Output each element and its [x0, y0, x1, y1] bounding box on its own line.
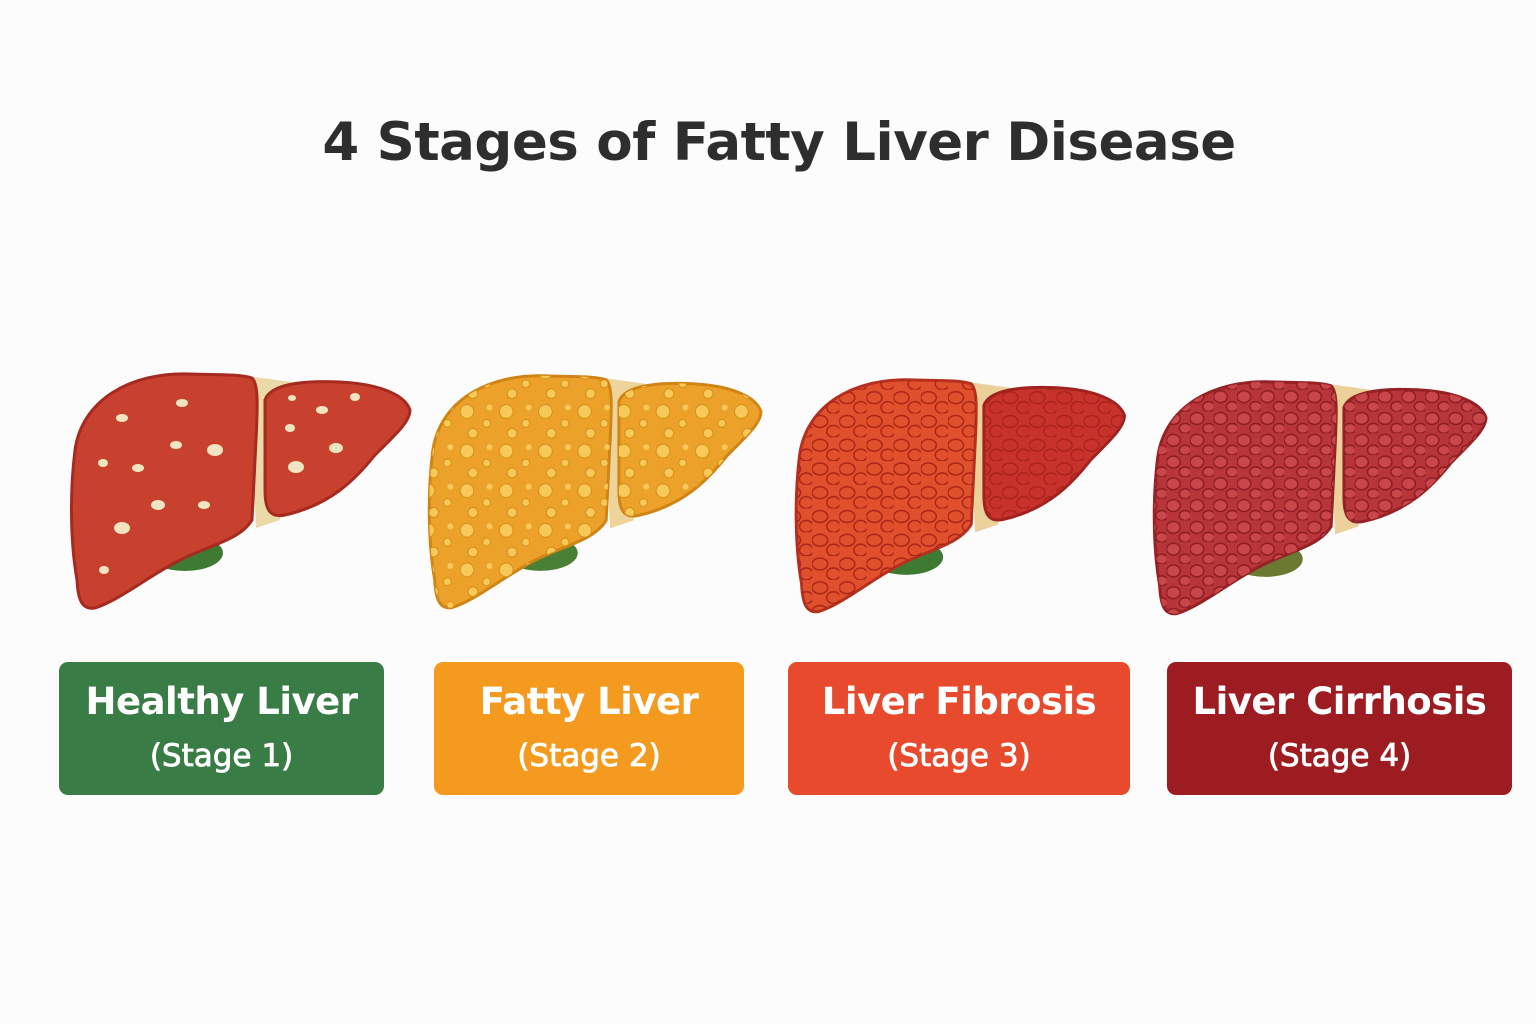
liver: healthy — [71, 374, 410, 608]
label: stage 1: (Stage 1) — [150, 738, 293, 774]
label: stage 3: (Stage 3) — [887, 738, 1031, 774]
liver: fibrosis — [796, 380, 1124, 612]
title: 4 Stages of Fatty Liver Disease — [322, 112, 1236, 173]
label: stage 2: (Stage 2) — [517, 738, 661, 774]
label: stage 1 — [59, 662, 384, 795]
label: stage 3: Liver Fibrosis — [822, 680, 1096, 723]
label: stage 2 — [434, 662, 744, 795]
liver: fatty — [429, 376, 761, 608]
label: stage 2: Fatty Liver — [480, 680, 698, 723]
label: stage 1: Healthy Liver — [86, 680, 357, 723]
liver: cirrhosis — [1154, 382, 1486, 614]
label: stage 4 — [1167, 662, 1512, 795]
label: stage 3 — [788, 662, 1130, 795]
label: stage 4: (Stage 4) — [1268, 738, 1411, 774]
label: stage 4: Liver Cirrhosis — [1193, 680, 1486, 723]
